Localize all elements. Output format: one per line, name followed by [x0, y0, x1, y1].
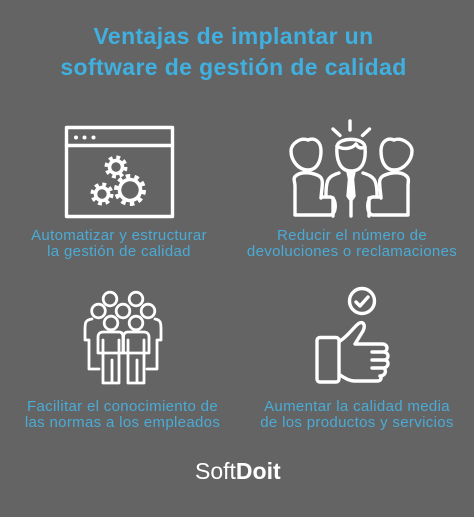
icon: team of three people	[291, 121, 412, 216]
title	[60, 23, 407, 80]
icon: group of employees	[85, 292, 161, 383]
caption: automatizar: la gestión de calidad	[47, 243, 191, 260]
title: software de gestión de calidad	[60, 54, 407, 80]
caption: aumentar: Aumentar la calidad media	[264, 398, 450, 415]
icon: thumbs up with check mark	[317, 288, 388, 382]
title: Ventajas de implantar un	[93, 23, 374, 49]
caption: reducir: devoluciones o reclamaciones	[247, 243, 457, 260]
caption: aumentar: de los productos y servicios	[260, 414, 454, 431]
caption: automatizar: Automatizar y estructurar	[31, 227, 207, 244]
caption: facilitar	[25, 398, 220, 431]
caption: reducir	[247, 227, 457, 260]
caption: automatizar	[31, 227, 207, 260]
icon: browser window with gears	[66, 128, 172, 216]
caption: facilitar: Facilitar el conocimiento de	[27, 398, 218, 415]
caption: reducir: Reducir el número de	[277, 227, 427, 244]
caption: aumentar	[260, 398, 454, 431]
logo: SoftDoit	[195, 458, 281, 484]
caption: facilitar: las normas a los empleados	[25, 414, 220, 431]
